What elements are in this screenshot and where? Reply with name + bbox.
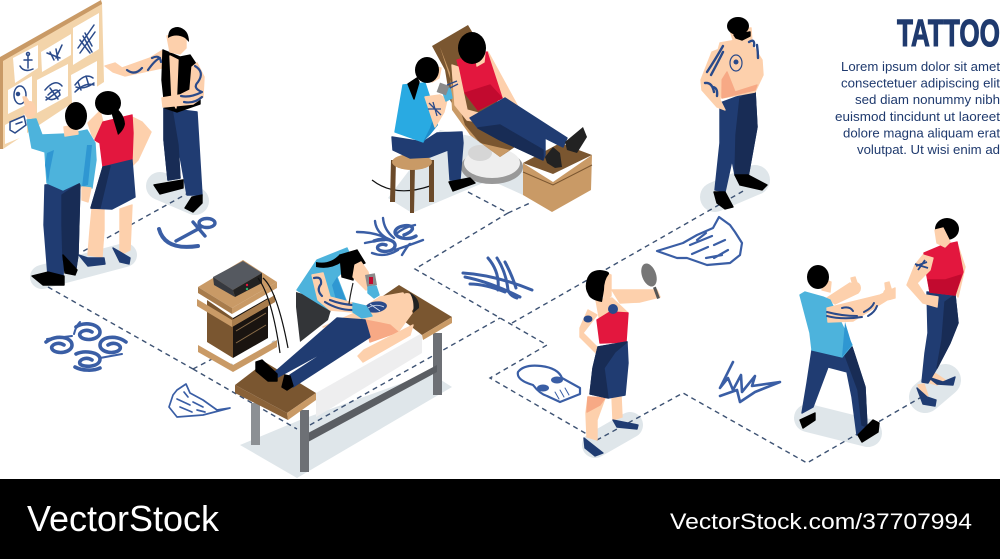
person: man with sunglasses — [701, 17, 767, 209]
footer band — [0, 479, 1000, 559]
body text block — [835, 60, 1000, 157]
person: woman with hand mirror — [580, 261, 660, 456]
person: man giving thumbs up — [800, 265, 895, 442]
body text block: consectetuer adipiscing elit — [841, 76, 1000, 90]
icon: top swirl tattoo — [357, 218, 423, 255]
tattoo machine cabinet — [197, 260, 288, 372]
massage table — [235, 285, 452, 472]
person: seated female tattooist — [372, 57, 475, 213]
body text block: euismod tincidunt ut laoreet — [835, 110, 1000, 124]
foot rest box — [523, 143, 592, 212]
icon: left swirl tattoo — [46, 322, 126, 370]
tattoo chair — [432, 25, 533, 184]
icon: lightning tribal tattoo — [720, 362, 780, 402]
design board — [0, 0, 104, 149]
person: customer man in blue shirt — [23, 97, 96, 285]
floor shadows — [42, 130, 945, 478]
footer logo: VectorStock — [27, 498, 220, 539]
body text block: sed diam nonummy nibh — [855, 93, 1000, 107]
person: customer woman in red top — [79, 91, 151, 266]
person: tattooist with beard — [296, 248, 379, 342]
icon: wolf head tattoo large — [657, 217, 742, 265]
icon: anchor — [159, 218, 215, 247]
body text block: dolore magna aliquam erat — [843, 126, 1000, 140]
body text block: Lorem ipsum dolor sit amet — [841, 60, 1000, 74]
person: seated client in red top — [452, 32, 587, 168]
icon: skull tattoo — [518, 366, 580, 402]
icon: tribal lines tattoo — [463, 258, 532, 298]
person: tattoo artist in vest — [105, 27, 204, 212]
icon: wolf head tattoo small — [169, 384, 230, 417]
person: woman with arm tattoo — [907, 218, 965, 406]
footer url: VectorStock.com/37707994 — [670, 509, 972, 534]
body text block: volutpat. Ut wisi enim ad — [857, 143, 1000, 157]
dashed flow path — [48, 190, 925, 463]
person: patient lying on table — [256, 292, 419, 390]
